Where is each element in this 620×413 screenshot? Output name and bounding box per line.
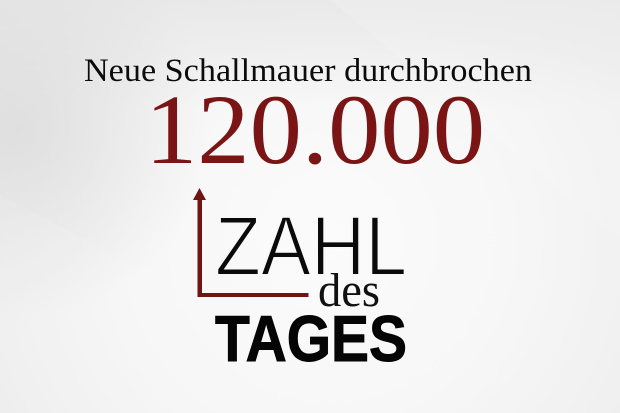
headline: Neue Schallmauer durchbrochen: [84, 53, 532, 89]
key number: 120.000: [145, 74, 485, 185]
logo word: ZAHL: ZAHL: [215, 199, 407, 293]
logo word: des: des: [318, 264, 380, 317]
icon: rising arrow axis: [193, 188, 308, 297]
logo word: TAGES: TAGES: [215, 302, 407, 375]
